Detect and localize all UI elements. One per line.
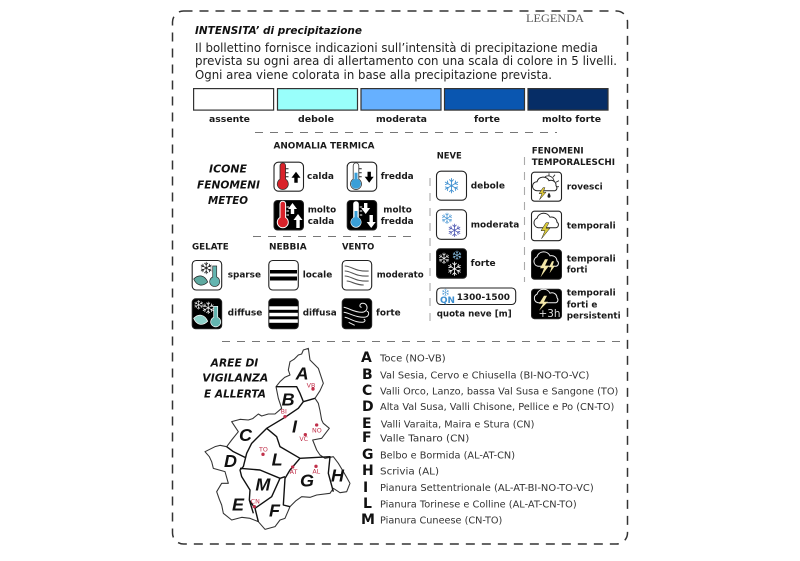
label: very cold: molto <box>383 206 412 216</box>
list of alert areas: A <box>361 350 372 366</box>
label: widespread fog: diffusa <box>303 309 337 319</box>
map city markers: AL <box>312 468 321 475</box>
heading: weather icons: ICONE <box>209 164 248 176</box>
label: snow level: quota neve [m] <box>437 310 512 320</box>
list of alert areas: M <box>361 512 375 528</box>
heading: fog: NEBBIA <box>269 242 307 252</box>
icon: showers <box>532 172 562 201</box>
intro text <box>195 41 617 82</box>
map of alert areas <box>205 348 350 529</box>
list of alert areas: G <box>362 447 374 463</box>
label: cold: fredda <box>381 172 414 182</box>
list of alert areas: B <box>362 367 373 383</box>
map city markers: VC <box>299 436 309 443</box>
snow level box: 1300-1500 <box>457 293 510 303</box>
intro text: Il bollettino fornisce indicazioni sull’intensità di precipitazione media <box>195 41 598 55</box>
label: local fog: locale <box>303 271 332 281</box>
label: strong thunderstorms: forti <box>567 266 587 276</box>
list of alert areas: C <box>362 383 372 399</box>
map city markers: TO <box>258 447 268 454</box>
map city markers: CN <box>251 498 260 505</box>
map area letters: L <box>272 449 283 469</box>
icon: persistent strong thunderstorms: +3h <box>538 307 561 320</box>
map area letters: D <box>224 451 237 471</box>
label: persistent strong thunderstorms: forti e <box>567 300 597 310</box>
legend frame <box>172 11 628 544</box>
map city markers: AT <box>290 469 298 476</box>
label: very warm: molto <box>308 206 336 216</box>
heading: weather icons: METEO <box>208 195 248 207</box>
label: very cold <box>381 206 414 227</box>
heading: thermal anomaly: ANOMALIA TERMICA <box>274 142 375 152</box>
icon: scattered frost <box>192 260 222 290</box>
label: warm: calda <box>307 172 334 182</box>
list of alert areas: H <box>362 463 374 479</box>
map area letters: C <box>239 425 253 445</box>
heading: thunderstorm phenomena <box>532 146 615 168</box>
label: persistent strong thunderstorms: persistenti <box>567 311 621 321</box>
list of alert areas: Valle Tanaro (CN) <box>380 434 469 445</box>
colour scale labels: forte <box>474 115 500 125</box>
icon: local fog <box>269 260 298 290</box>
label: thunderstorms: temporali <box>567 221 616 231</box>
map area letters: H <box>331 465 345 485</box>
list of alert areas: Scrivia (AL) <box>380 466 439 477</box>
list of alert areas: Pianura Settentrionale (AL-AT-BI-NO-TO-VC) <box>380 483 594 494</box>
map city markers <box>251 382 322 508</box>
list of alert areas: Pianura Cuneese (CN-TO) <box>380 515 502 526</box>
label: persistent strong thunderstorms: temporali <box>567 289 616 299</box>
list of alert areas: Val Sesia, Cervo e Chiusella (BI-NO-TO-VC) <box>380 370 589 381</box>
map city markers: VB <box>307 382 315 389</box>
heading: frost: GELATE <box>192 242 229 252</box>
icon: moderate snow <box>436 210 466 239</box>
icon: persistent strong thunderstorms <box>532 289 562 320</box>
map area borders <box>227 387 333 522</box>
snow level box: QN <box>440 296 455 306</box>
list of alert areas: E <box>362 416 372 432</box>
map outline <box>205 348 350 529</box>
icon: widespread frost <box>192 299 222 329</box>
icon: strong wind <box>342 299 372 329</box>
icon: light snow <box>436 171 466 200</box>
heading: precipitation intensity: INTENSITA’ di precipitazione <box>195 25 362 37</box>
heading: weather icons: FENOMENI <box>197 180 260 192</box>
list of alert areas: L <box>363 496 372 512</box>
list of alert areas: Alta Val Susa, Valli Chisone, Pellice e Po (CN-TO) <box>380 402 614 413</box>
label: showers: rovesci <box>567 182 603 192</box>
label: very warm: calda <box>308 217 334 227</box>
icon: widespread fog <box>269 299 298 329</box>
colour scale <box>194 89 608 110</box>
colour scale labels <box>209 115 601 125</box>
label: very cold: fredda <box>381 217 414 227</box>
list of alert areas <box>361 350 618 528</box>
colour scale labels: molto forte <box>542 115 601 125</box>
label: moderate wind: moderato <box>377 271 424 281</box>
label: persistent strong thunderstorms <box>567 289 621 321</box>
label: widespread frost: diffuse <box>228 309 262 319</box>
intro text: prevista su ogni area di allertamento con una scala di colore in 5 livelli. <box>195 54 617 68</box>
heading: snow: NEVE <box>437 151 462 161</box>
label: moderate snow: moderata <box>471 221 519 231</box>
map area letters <box>224 363 345 521</box>
colour scale labels: debole <box>298 115 334 125</box>
map city markers: BI <box>281 408 287 415</box>
list of alert areas: Valli Orco, Lanzo, bassa Val Susa e Sangone (TO) <box>380 386 618 397</box>
list of alert areas: Belbo e Bormida (AL-AT-CN) <box>380 450 515 461</box>
intro text: Ogni area viene colorata in base alla precipitazione prevista. <box>195 68 552 82</box>
list of alert areas: I <box>363 480 368 496</box>
heading: thunderstorm phenomena: TEMPORALESCHI <box>532 158 615 168</box>
heading: thunderstorm phenomena: FENOMENI <box>532 146 584 156</box>
colour scale labels: assente <box>209 115 250 125</box>
label: scattered frost: sparse <box>228 271 261 281</box>
label: strong thunderstorms <box>567 255 616 276</box>
icon: moderate wind <box>342 260 372 290</box>
label: strong wind: forte <box>376 309 401 319</box>
icon: very warm <box>274 200 304 230</box>
label: light snow: debole <box>471 181 505 191</box>
heading: wind: VENTO <box>342 242 375 252</box>
icon: heavy snow <box>436 249 466 278</box>
colour scale labels: moderata <box>376 115 427 125</box>
list of alert areas: Pianura Torinese e Colline (AL-AT-CN-TO) <box>380 500 577 511</box>
legend label: LEGENDA <box>526 11 584 25</box>
map area letters: F <box>269 501 281 521</box>
icon: very cold <box>347 200 377 230</box>
heading: vigilance areas: VIGILANZA <box>202 373 268 385</box>
heading: weather icons <box>197 164 260 207</box>
map area letters: G <box>300 471 314 491</box>
list of alert areas: Valli Varaita, Maira e Stura (CN) <box>381 419 534 430</box>
map city markers: NO <box>312 428 322 435</box>
map area letters: E <box>232 495 245 515</box>
label: very warm <box>308 206 336 227</box>
map area letters: B <box>282 389 295 409</box>
map area letters: I <box>292 417 298 437</box>
icon: warm <box>274 162 304 191</box>
heading: vigilance areas: AREE DI <box>210 358 258 370</box>
map area letters: M <box>255 474 271 494</box>
icon: cold <box>347 162 377 191</box>
label: heavy snow: forte <box>471 259 496 269</box>
heading: vigilance areas: E ALLERTA <box>204 389 266 401</box>
icon: thunderstorms <box>532 211 562 241</box>
list of alert areas: F <box>362 430 372 446</box>
list of alert areas: Toce (NO-VB) <box>379 354 446 365</box>
label: strong thunderstorms: temporali <box>567 255 616 265</box>
snow level box <box>437 288 516 306</box>
list of alert areas: D <box>362 399 374 415</box>
icon: strong thunderstorms <box>532 250 562 279</box>
heading: vigilance areas <box>202 358 268 401</box>
map area letters: A <box>295 363 309 383</box>
